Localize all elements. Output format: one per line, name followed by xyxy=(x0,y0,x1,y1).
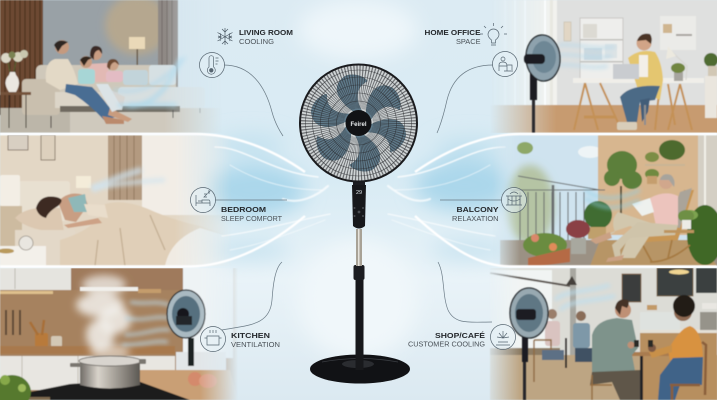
heading: living room xyxy=(239,28,293,46)
heading: home office: HOME OFFICE xyxy=(424,28,480,37)
fan head xyxy=(300,64,418,185)
woman xyxy=(91,50,102,60)
shelf xyxy=(580,18,623,80)
boy xyxy=(80,56,92,68)
background patrons xyxy=(547,309,557,319)
icon: balcony plants badge xyxy=(502,188,526,212)
tomatoes xyxy=(188,372,202,386)
counter xyxy=(640,332,717,400)
lamp and plants xyxy=(676,56,688,80)
icon: cooking pot badge xyxy=(200,326,226,352)
connector lines xyxy=(215,65,502,330)
woman in chair xyxy=(646,190,694,242)
airflow xyxy=(115,58,185,106)
panel: bedroom photo xyxy=(0,135,240,266)
sofa xyxy=(36,65,176,95)
kitchen fan xyxy=(167,290,205,366)
panel: living room photo xyxy=(0,0,230,133)
man xyxy=(615,302,631,318)
panel: balcony photo xyxy=(490,135,717,266)
heading: kitchen: VENTILATION xyxy=(231,342,280,349)
control panel: 29 xyxy=(356,190,362,196)
cafe fan xyxy=(510,288,548,400)
railing xyxy=(510,175,606,241)
sleeper xyxy=(58,194,88,222)
icon: thermometer badge xyxy=(200,52,224,78)
central stand fan xyxy=(300,64,418,384)
heading: living room: COOLING xyxy=(239,39,274,46)
airflow xyxy=(122,302,170,345)
nightstand xyxy=(0,246,46,266)
control panel xyxy=(352,185,366,228)
pegboard xyxy=(660,16,696,50)
distant tree xyxy=(506,165,554,245)
vase and table xyxy=(0,92,31,95)
heading: shop cafe: CUSTOMER COOLING xyxy=(408,342,485,348)
salad xyxy=(0,375,31,400)
airflow xyxy=(555,285,615,310)
icon: customer cooling badge xyxy=(490,324,516,350)
office fan xyxy=(524,34,562,133)
fan base xyxy=(310,354,410,384)
airflow xyxy=(585,190,640,208)
fan head: Feirel xyxy=(350,122,367,128)
heading: balcony: BALCONY xyxy=(456,205,498,214)
icon: light bulb xyxy=(480,23,507,45)
pole xyxy=(354,229,364,370)
panel: home office photo xyxy=(480,0,717,133)
wall xyxy=(42,0,158,66)
panel: kitchen photo xyxy=(0,268,240,400)
airflow glow and wave bands xyxy=(205,0,515,360)
heading: shop cafe xyxy=(408,331,485,348)
heading: bedroom xyxy=(221,205,283,223)
icon: snowflake xyxy=(218,28,232,45)
desk xyxy=(573,78,704,83)
heading: home office: SPACE xyxy=(456,39,481,46)
heading: home office xyxy=(424,28,481,46)
heading: balcony xyxy=(452,205,498,223)
heading: bedroom: BEDROOM xyxy=(221,205,266,214)
blanket xyxy=(60,202,196,265)
heading: kitchen: KITCHEN xyxy=(231,331,270,340)
cafe table xyxy=(632,352,669,356)
panel: shop cafe photo xyxy=(490,268,717,400)
woman xyxy=(674,310,692,322)
man xyxy=(636,39,652,51)
icon: bed badge xyxy=(190,188,216,212)
heading: balcony: RELAXATION xyxy=(452,216,498,223)
girl xyxy=(110,62,119,71)
steam xyxy=(76,275,131,360)
heading: living room: LIVING ROOM xyxy=(239,28,293,37)
icon: desk worker badge xyxy=(492,52,518,76)
heading: bedroom: SLEEP COMFORT xyxy=(221,216,283,223)
white curved separators xyxy=(0,134,717,266)
heading: shop cafe: SHOP/CAFÉ xyxy=(435,331,485,340)
chalkboards xyxy=(622,274,641,302)
plants xyxy=(604,151,642,189)
airflow xyxy=(558,45,615,67)
pot xyxy=(70,356,146,388)
man xyxy=(55,40,69,54)
heading: kitchen xyxy=(231,331,280,349)
